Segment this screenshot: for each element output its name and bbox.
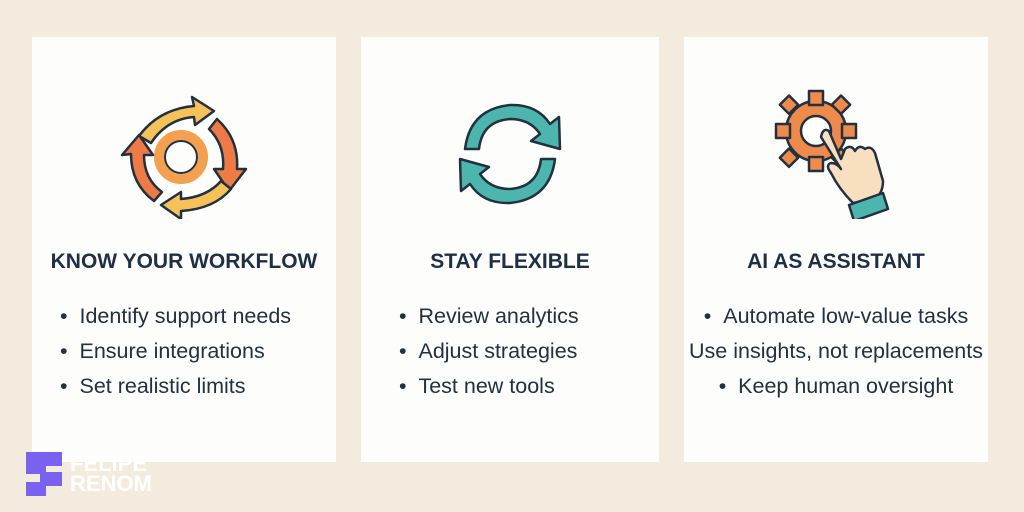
bullet list: Use insights, not replacements <box>689 339 983 363</box>
heading: STAY FLEXIBLE <box>430 250 590 273</box>
heading: KNOW YOUR WORKFLOW <box>51 250 317 273</box>
bullet list <box>60 304 291 398</box>
panel: know your workflow <box>32 37 336 462</box>
bullet list: • Adjust strategies <box>399 339 577 363</box>
icon: refresh arrows <box>458 104 562 204</box>
bullet list: • Test new tools <box>399 374 555 398</box>
bullet list: • Identify support needs <box>60 304 291 328</box>
heading: AI AS ASSISTANT <box>747 250 925 273</box>
icon: circular arrows <box>120 96 248 219</box>
bullet list: • Ensure integrations <box>60 339 265 363</box>
logo: RENOM <box>70 471 152 496</box>
bullet list <box>399 304 579 398</box>
icon: gear with hand <box>774 90 890 219</box>
logo <box>26 451 152 496</box>
bullet list: • Automate low-value tasks <box>704 304 968 328</box>
bullet list: • Review analytics <box>399 304 579 328</box>
panel: ai as assistant <box>684 37 988 462</box>
logo: FELIPE <box>70 451 147 476</box>
bullet list <box>689 304 983 398</box>
panel: stay flexible <box>361 37 659 462</box>
bullet list: • Set realistic limits <box>60 374 246 398</box>
bullet list: • Keep human oversight <box>719 374 953 398</box>
